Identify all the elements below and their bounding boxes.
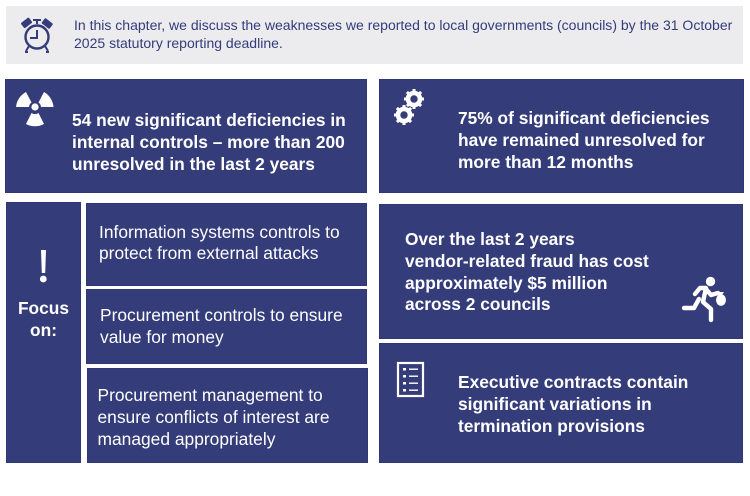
focus item text <box>99 222 340 263</box>
focus item text: protect from external attacks <box>99 243 318 263</box>
statement text: Executive contracts contain <box>458 372 688 392</box>
statement text <box>72 110 346 174</box>
focus heading <box>18 298 69 340</box>
focus item text: Procurement management to <box>98 385 323 405</box>
panel: chapter intro <box>6 6 743 64</box>
intro text: In this chapter, we discuss the weaknesses we reported to local governments (councils) by the 31 October <box>74 16 732 32</box>
focus heading: Focus <box>18 298 69 318</box>
statement text: have remained unresolved for <box>458 130 705 150</box>
focus item text: managed appropriately <box>98 429 275 449</box>
intro text <box>74 16 732 51</box>
icon: checklist document <box>396 362 424 398</box>
focus item text <box>100 305 343 347</box>
statement text: vendor-related fraud has cost <box>405 251 649 271</box>
panel: procurement controls <box>86 289 367 364</box>
focus item text: Procurement controls to ensure <box>100 305 343 325</box>
statement text: internal controls – more than 200 <box>72 132 345 152</box>
icon: running figure with money bag <box>682 276 726 322</box>
statement text: more than 12 months <box>458 152 633 172</box>
focus item text <box>98 385 330 449</box>
focus heading: on: <box>30 320 57 340</box>
intro text: 2025 statutory reporting deadline. <box>74 35 283 51</box>
panel: new significant deficiencies <box>5 79 367 193</box>
statement text <box>458 108 710 172</box>
icon: alarm clock <box>21 18 53 53</box>
panel: unresolved deficiencies <box>379 79 744 193</box>
statement text: 75% of significant deficiencies <box>458 108 710 128</box>
icon: gears <box>394 89 424 125</box>
panel: procurement management <box>87 368 368 463</box>
statement text: termination provisions <box>458 416 645 436</box>
focus item text: value for money <box>100 327 224 347</box>
icon: radiation symbol <box>16 92 54 126</box>
panel: vendor-related fraud <box>379 204 743 339</box>
statement text: Over the last 2 years <box>405 229 575 249</box>
statement text: across 2 councils <box>405 294 551 314</box>
statement text: approximately $5 million <box>405 273 607 293</box>
statement text: 54 new significant deficiencies in <box>72 110 346 130</box>
panel: executive contracts <box>379 343 743 463</box>
panel: focus on <box>6 202 81 463</box>
panel: information systems controls <box>86 203 367 286</box>
focus item text: ensure conflicts of interest are <box>98 407 330 427</box>
statement text: unresolved in the last 2 years <box>72 154 315 174</box>
focus item text: Information systems controls to <box>99 222 340 242</box>
icon: exclamation mark <box>40 250 47 282</box>
statement text: significant variations in <box>458 394 652 414</box>
statement text <box>405 229 649 314</box>
statement text <box>458 372 688 436</box>
